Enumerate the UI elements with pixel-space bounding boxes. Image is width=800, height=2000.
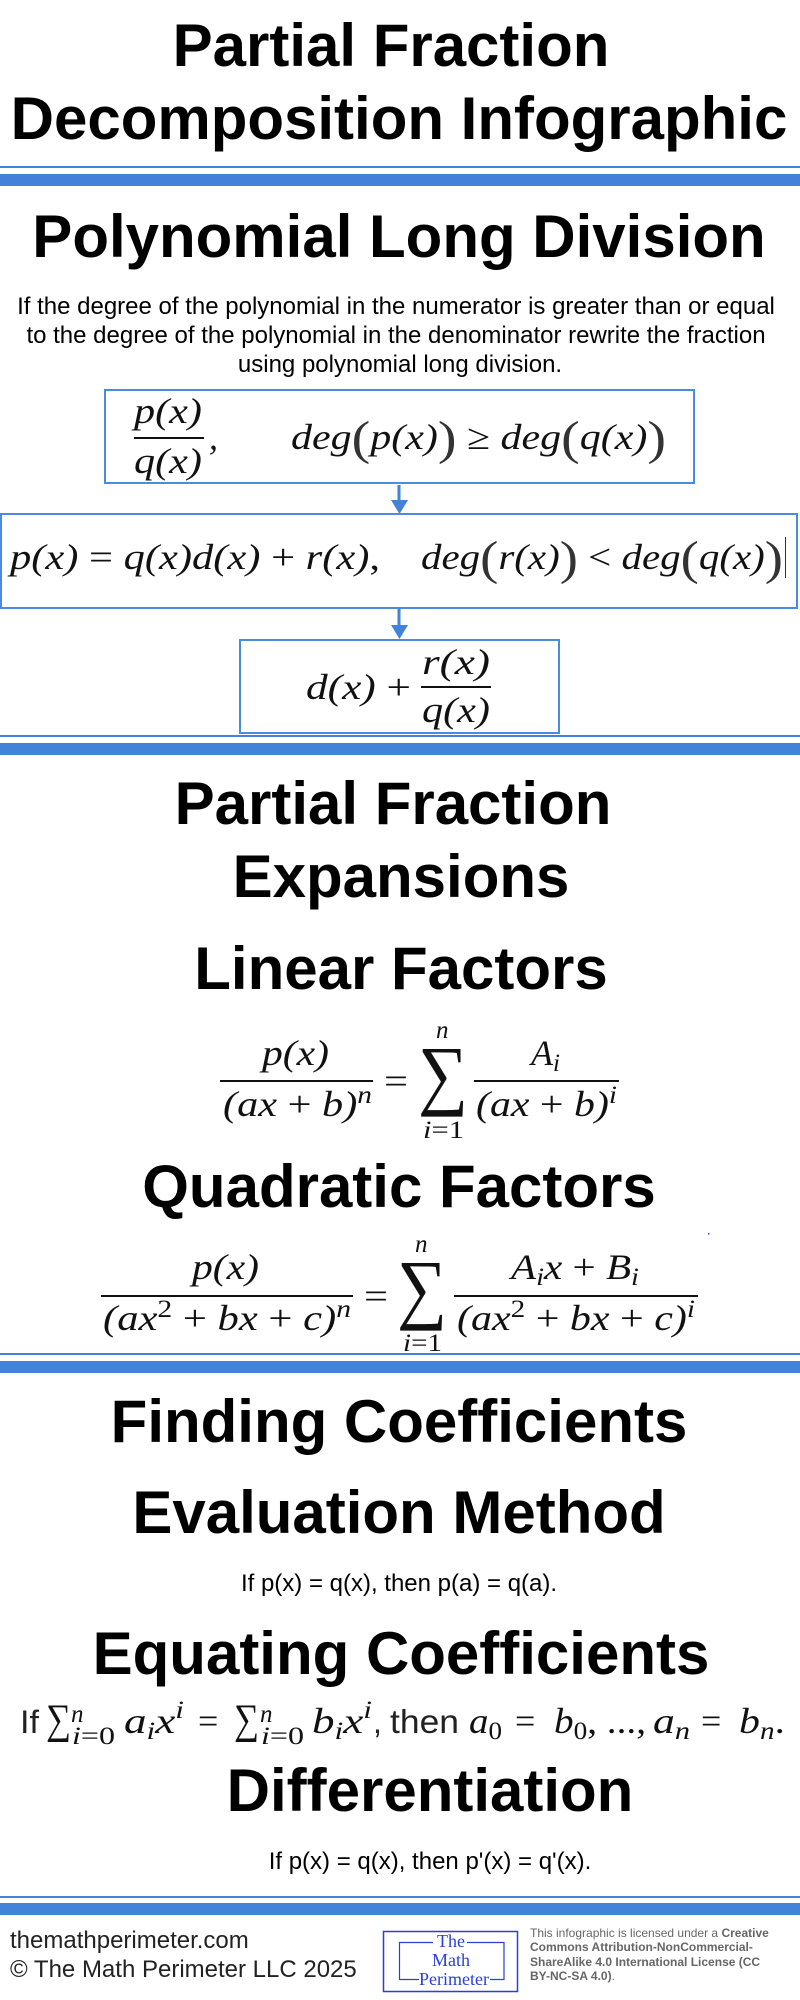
formula: linear factors expansion: i: [553, 1050, 560, 1077]
text block: evaluation method: If p(x) = q(x), then p(a) = q(a).: [241, 1570, 557, 1597]
formula: equating coefficients: x: [342, 1701, 363, 1741]
formula: p over q: ,: [209, 417, 218, 457]
formula: degree condition: (: [352, 412, 370, 465]
formula: quadratic factors expansion: A: [511, 1247, 533, 1287]
title: Partial Fraction: [173, 12, 609, 79]
formula: degree condition: p(x): [367, 417, 438, 457]
formula: equating coefficients: a: [469, 1701, 487, 1741]
formula: equating coefficients: 0: [488, 1718, 502, 1745]
formula: degree of remainder: (: [681, 532, 699, 585]
heading: partial fraction expansions: Expansions: [233, 843, 569, 910]
formula: quadratic factors expansion: i: [687, 1296, 695, 1323]
text block: long division intro: [17, 293, 775, 378]
formula: quadratic factors expansion: =: [364, 1276, 388, 1316]
formula: degree of remainder: deg: [622, 537, 674, 577]
formula: equating coefficients: x: [154, 1701, 175, 1741]
formula: equating coefficients: .: [775, 1701, 785, 1741]
arrow: step one to two: [391, 485, 408, 514]
formula: quadratic factors expansion: [101, 1231, 710, 1357]
formula: quadratic factors expansion: 2: [511, 1296, 525, 1323]
formula: degree of remainder: ): [560, 532, 578, 585]
panel: starting fraction: [105, 390, 694, 483]
formula: quadratic factors expansion: n: [336, 1296, 351, 1323]
panel: result: [240, 640, 559, 733]
formula: equating coefficients: ,: [373, 1704, 382, 1740]
footer: website and copyright: themathperimeter.com: [10, 1927, 249, 1954]
text block: long division intro: using polynomial long division.: [238, 351, 562, 378]
heading: linear factors: Linear Factors: [194, 935, 608, 1002]
formula: equating coefficients: , ...,: [587, 1701, 646, 1741]
formula: equating coefficients: i: [335, 1718, 343, 1745]
formula: linear factors expansion: (ax + b): [223, 1084, 352, 1124]
formula: equating coefficients: i: [147, 1718, 155, 1745]
formula: equating coefficients: n: [260, 1701, 272, 1728]
formula: equating coefficients: 0: [574, 1718, 587, 1745]
formula: linear factors expansion: n: [436, 1017, 448, 1044]
formula: equating coefficients: =: [198, 1701, 218, 1741]
formula: p over q: q(x): [134, 441, 202, 481]
logo: the math perimeter: The: [437, 1931, 465, 1951]
formula: degree of remainder: r(x): [498, 537, 560, 577]
formula: equating coefficients: n: [71, 1701, 84, 1728]
formula: quadratic factors expansion: + B: [571, 1247, 628, 1287]
formula: equating coefficients: then: [390, 1703, 459, 1740]
formula: quadratic factors expansion: x: [543, 1247, 562, 1287]
formula: d plus r over q: r(x): [422, 642, 490, 682]
formula: linear factors expansion: i: [609, 1082, 617, 1109]
formula: degree condition: deg: [291, 417, 343, 457]
title: Decomposition Infographic: [11, 85, 787, 152]
license text: ShareAlike 4.0 International License (CC: [530, 1955, 760, 1969]
formula: equating coefficients: ∑: [46, 1697, 71, 1743]
heading: finding coefficients: Finding Coefficients: [111, 1388, 687, 1455]
heading: partial fraction expansions: Partial Fraction: [175, 770, 611, 837]
formula: equating coefficients: n: [760, 1718, 775, 1745]
formula: linear factors expansion: [220, 1017, 619, 1144]
formula: linear factors expansion: (ax + b): [476, 1084, 604, 1124]
formula: degree of remainder: deg: [421, 537, 473, 577]
heading: partial fraction expansions: [175, 770, 611, 910]
logo: the math perimeter: Math: [432, 1950, 470, 1970]
heading: quadratic factors: Quadratic Factors: [142, 1153, 656, 1220]
formula: degree condition: ≥: [456, 417, 501, 457]
formula: quadratic factors expansion: (ax: [103, 1298, 149, 1338]
formula: equating coefficients: a: [124, 1701, 142, 1741]
formula: d plus r over q: q(x): [422, 690, 490, 730]
section divider: expansions: [0, 735, 800, 755]
formula: equating coefficients: i: [363, 1697, 372, 1724]
logo: the math perimeter: Perimeter: [419, 1969, 489, 1989]
formula: equating coefficients: b: [554, 1701, 572, 1741]
formula: degree of remainder: ): [765, 532, 783, 585]
section divider: top: [0, 166, 800, 186]
formula: p = qd + r: p(x) = q(x)d(x) + r(x) ,: [6, 537, 380, 577]
formula: linear factors expansion: ∑: [418, 1030, 468, 1117]
formula: equating coefficients: =: [515, 1701, 535, 1741]
formula: linear factors expansion: A: [531, 1033, 553, 1073]
formula: equating coefficients: If: [20, 1704, 39, 1740]
formula: d plus r over q: d(x) +: [306, 667, 411, 707]
footer: website and copyright: © The Math Perimeter LLC 2025: [10, 1956, 357, 1983]
formula: linear factors expansion: n: [357, 1082, 372, 1109]
formula: p over q: [130, 391, 218, 481]
formula: d plus r over q: [306, 642, 491, 730]
formula: equating coefficients: [20, 1697, 785, 1750]
formula: quadratic factors expansion: i: [631, 1264, 639, 1291]
formula: equating coefficients: b: [312, 1701, 330, 1741]
formula: linear factors expansion: =: [384, 1061, 408, 1101]
heading: equating coefficients: Equating Coefficients: [93, 1620, 709, 1687]
formula: linear factors expansion: p(x): [259, 1033, 329, 1073]
formula: equating coefficients: b: [739, 1701, 757, 1741]
formula: quadratic factors expansion: i=1: [403, 1330, 442, 1357]
formula: degree condition: (: [561, 412, 580, 465]
formula: quadratic factors expansion: bx + c): [570, 1298, 682, 1338]
formula: quadratic factors expansion: p(x): [189, 1247, 259, 1287]
license text: Commons Attribution-NonCommercial-: [530, 1940, 753, 1954]
heading: evaluation method: Evaluation Method: [132, 1479, 666, 1546]
heading: polynomial long division: Polynomial Long Division: [32, 203, 766, 270]
formula: linear factors expansion: i=1: [423, 1117, 464, 1144]
arrow: step two to three: [391, 609, 408, 639]
footer: website and copyright: [10, 1927, 357, 1983]
text block: long division intro: to the degree of the polynomial in the denominator rewrite the fraction: [26, 322, 766, 349]
formula: quadratic factors expansion: 2: [157, 1296, 172, 1323]
formula: degree condition: deg: [501, 417, 553, 457]
formula: equating coefficients: i: [175, 1697, 184, 1724]
formula: quadratic factors expansion: (ax: [457, 1298, 503, 1338]
formula: quadratic factors expansion: +: [172, 1298, 218, 1338]
formula: p over q: p(x): [130, 391, 202, 431]
formula: degree of remainder: <: [578, 537, 622, 577]
formula: quadratic factors expansion: ∑: [397, 1244, 447, 1331]
formula: degree condition: q(x): [580, 417, 647, 457]
formula: equating coefficients: n: [675, 1718, 690, 1745]
formula: equating coefficients: i=0: [261, 1723, 304, 1750]
formula: quadratic factors expansion: bx + c): [218, 1298, 331, 1338]
formula: quadratic factors expansion: +: [525, 1298, 570, 1338]
section divider: footer: [0, 1896, 800, 1915]
license text: This infographic is licensed under a Creative: [530, 1926, 769, 1940]
formula: equating coefficients: ∑: [234, 1697, 259, 1743]
formula: quadratic factors expansion: n: [415, 1231, 428, 1258]
logo: the math perimeter: [384, 1931, 518, 1992]
formula: equating coefficients: i=0: [72, 1723, 115, 1750]
license text: [530, 1926, 769, 1983]
formula: degree of remainder: (: [480, 532, 498, 585]
heading: differentiation: Differentiation: [227, 1757, 633, 1824]
formula: degree condition: ): [647, 412, 666, 465]
formula: degree of remainder: q(x): [699, 537, 765, 577]
formula: degree condition: ): [438, 412, 456, 465]
formula: equating coefficients: =: [701, 1701, 721, 1741]
text block: long division intro: If the degree of the polynomial in the numerator is greater than or equal: [17, 293, 775, 320]
license text: BY-NC-SA 4.0).: [530, 1969, 615, 1983]
formula: equating coefficients: a: [653, 1701, 671, 1741]
title: [11, 12, 787, 152]
text block: differentiation: If p(x) = q(x), then p'(x) = q'(x).: [269, 1848, 591, 1875]
formula: quadratic factors expansion: i: [536, 1264, 544, 1291]
section divider: coefficients: [0, 1353, 800, 1373]
panel: division identity: [1, 514, 797, 608]
